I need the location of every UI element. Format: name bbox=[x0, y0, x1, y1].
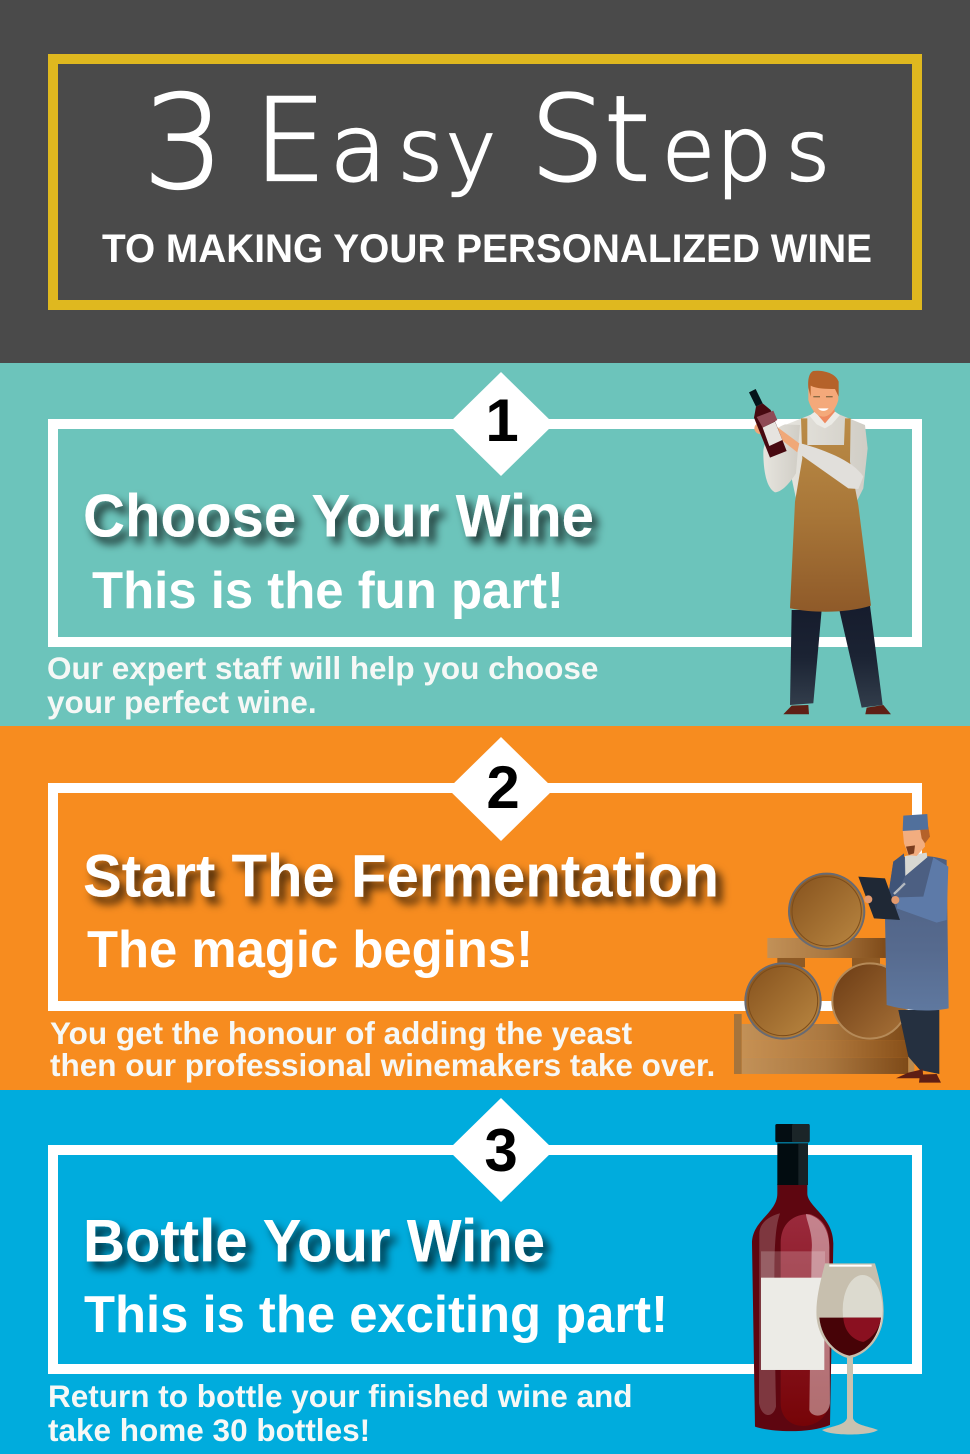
frame bbox=[53, 1150, 917, 1369]
panel: step 2 bbox=[0, 726, 970, 1090]
number badge 1 bbox=[448, 372, 554, 476]
heading: Choose Your Wine bbox=[83, 482, 594, 550]
number badge 3 bbox=[448, 1098, 554, 1202]
description: your perfect wine. bbox=[47, 684, 317, 720]
illustration: barrels and winemaker bbox=[734, 814, 949, 1083]
number badge 2 bbox=[448, 737, 554, 841]
title: t bbox=[604, 70, 650, 208]
illustration: sommelier with bottle bbox=[749, 371, 891, 714]
number badge 3: 3 bbox=[484, 1117, 518, 1184]
wooden rack bbox=[734, 938, 914, 1074]
title: y bbox=[446, 102, 496, 200]
title: e bbox=[662, 101, 715, 201]
number badge 1: 1 bbox=[485, 387, 519, 454]
winemaker bbox=[858, 814, 949, 1083]
heading: Bottle Your Wine bbox=[83, 1208, 545, 1274]
description: then our professional winemakers take over. bbox=[50, 1047, 715, 1083]
frame bbox=[53, 788, 917, 1006]
bottle bbox=[752, 1124, 833, 1431]
title: E bbox=[254, 74, 326, 207]
subheading: The magic begins! bbox=[87, 921, 533, 979]
title: a bbox=[330, 95, 386, 202]
gold title frame bbox=[53, 59, 917, 305]
subtitle: TO MAKING YOUR PERSONALIZED WINE bbox=[102, 227, 872, 271]
title: s bbox=[786, 102, 830, 200]
panel: step 3 bbox=[0, 1090, 970, 1454]
subheading: This is the fun part! bbox=[92, 562, 564, 620]
heading: Start The Fermentation bbox=[83, 842, 719, 910]
title: p bbox=[716, 98, 772, 201]
number badge 2: 2 bbox=[486, 754, 520, 821]
description: Our expert staff will help you choose bbox=[47, 650, 598, 686]
panel: header bbox=[0, 0, 970, 363]
panel: step 1 bbox=[0, 363, 970, 726]
description: You get the honour of adding the yeast bbox=[50, 1015, 633, 1051]
title: S bbox=[530, 70, 605, 208]
subheading: This is the exciting part! bbox=[84, 1286, 668, 1344]
wine glass bbox=[816, 1263, 884, 1434]
barrels bbox=[745, 874, 908, 1039]
description: Return to bottle your finished wine and bbox=[48, 1378, 633, 1414]
description: take home 30 bottles! bbox=[48, 1412, 370, 1448]
title: s bbox=[398, 101, 443, 201]
frame bbox=[53, 424, 917, 642]
title: 3 bbox=[143, 69, 224, 218]
illustration: wine bottle and glass bbox=[752, 1124, 884, 1434]
